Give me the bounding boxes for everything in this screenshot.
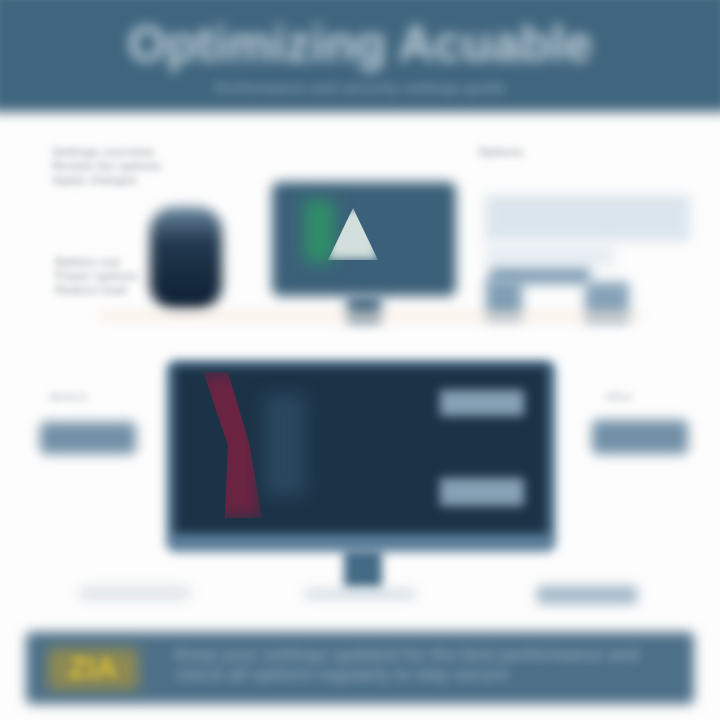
monitor stand (344, 550, 382, 588)
footer badge: ZIA (69, 652, 117, 685)
footer text: Keep your settings updated for the best performance and (175, 645, 639, 664)
code column: red (200, 372, 262, 518)
text block: top left 1 (49, 144, 163, 190)
light panel (485, 243, 615, 267)
bar top (490, 268, 590, 284)
code column: blue (265, 395, 305, 495)
icon: letter A (328, 208, 378, 260)
text block: top left 2: Battery use (55, 255, 120, 269)
light table (485, 195, 690, 241)
chart shapes (477, 260, 638, 330)
header banner (0, 0, 720, 112)
bottom label left (80, 586, 190, 600)
data box upper (440, 390, 524, 416)
footer bar (26, 632, 694, 704)
right callout button (592, 420, 688, 454)
monitor stand (347, 296, 381, 322)
footer text (173, 645, 640, 686)
monitor base (305, 590, 415, 598)
text block: top right label: Options (478, 145, 523, 159)
icon: mouse device (150, 207, 222, 309)
text block: top left 1: Settings overview (52, 145, 154, 159)
text block: top left 2: Power options (55, 269, 138, 283)
faint divider (100, 313, 640, 319)
title: Optimizing Acuable (128, 16, 592, 72)
large monitor (166, 360, 556, 552)
large monitor screen (174, 366, 548, 534)
bar right (585, 282, 629, 322)
data box lower (440, 478, 524, 506)
text block: top left 2: Reduce load (55, 283, 126, 297)
monitor screen (272, 182, 456, 296)
small monitor (262, 172, 466, 332)
bottom label right (537, 586, 637, 604)
footer text: check all options regularly to stay secure (175, 665, 509, 684)
left callout button (40, 422, 136, 454)
monitor panel green (304, 200, 334, 262)
text block: top left 1: Review the options (52, 159, 161, 173)
subtitle: Performance and security settings guide (215, 80, 505, 97)
right callout label: After (605, 390, 633, 404)
footer yellow badge text (48, 648, 138, 690)
bar left (486, 280, 522, 320)
text block: top left 2 (52, 254, 140, 298)
left callout label: Before (50, 390, 88, 404)
text block: top left 1: Apply changes (52, 173, 137, 187)
